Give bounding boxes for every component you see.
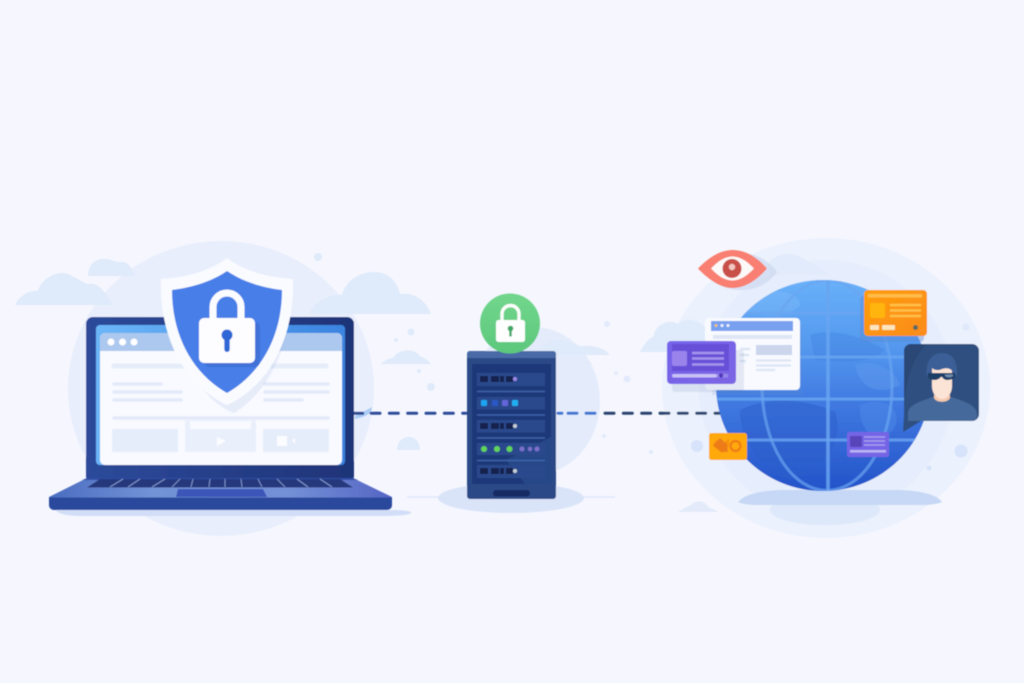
browser window card: [705, 318, 802, 395]
laptop screen: [96, 325, 345, 465]
orange card: [860, 290, 927, 342]
laptop: [49, 317, 411, 516]
security shield with padlock: [161, 258, 293, 413]
hacker avatar speech bubble: [903, 344, 979, 432]
small purple card: [847, 432, 889, 457]
surveillance eye: [698, 250, 777, 290]
globe ground shadow: [738, 490, 942, 505]
server rack: [438, 351, 584, 513]
shield outer: [161, 258, 293, 405]
server rows: [477, 373, 545, 478]
middle background: circle and cloud: [468, 321, 630, 475]
globe continents: [717, 280, 915, 492]
globe: [706, 275, 942, 505]
dashed connection line: [354, 407, 722, 419]
server floor shadow: [438, 483, 584, 513]
shield inner: [172, 271, 282, 393]
left background: circle and clouds: [15, 241, 615, 536]
keyboard: [87, 479, 353, 488]
laptop base: [49, 478, 392, 510]
right background: halo, clouds and dots: [640, 238, 990, 538]
purple card: [667, 341, 744, 392]
browser window on screen: [100, 333, 342, 465]
server cabinet: [467, 351, 556, 499]
orange image card: [709, 433, 747, 460]
green padlock badge: [480, 294, 540, 354]
laptop lid: [86, 317, 354, 483]
laptop shadow: [56, 510, 411, 516]
trackpad: [176, 489, 267, 497]
server slot: [493, 490, 530, 496]
illustration canvas: [16, 238, 990, 538]
padlock icon: [199, 293, 260, 367]
